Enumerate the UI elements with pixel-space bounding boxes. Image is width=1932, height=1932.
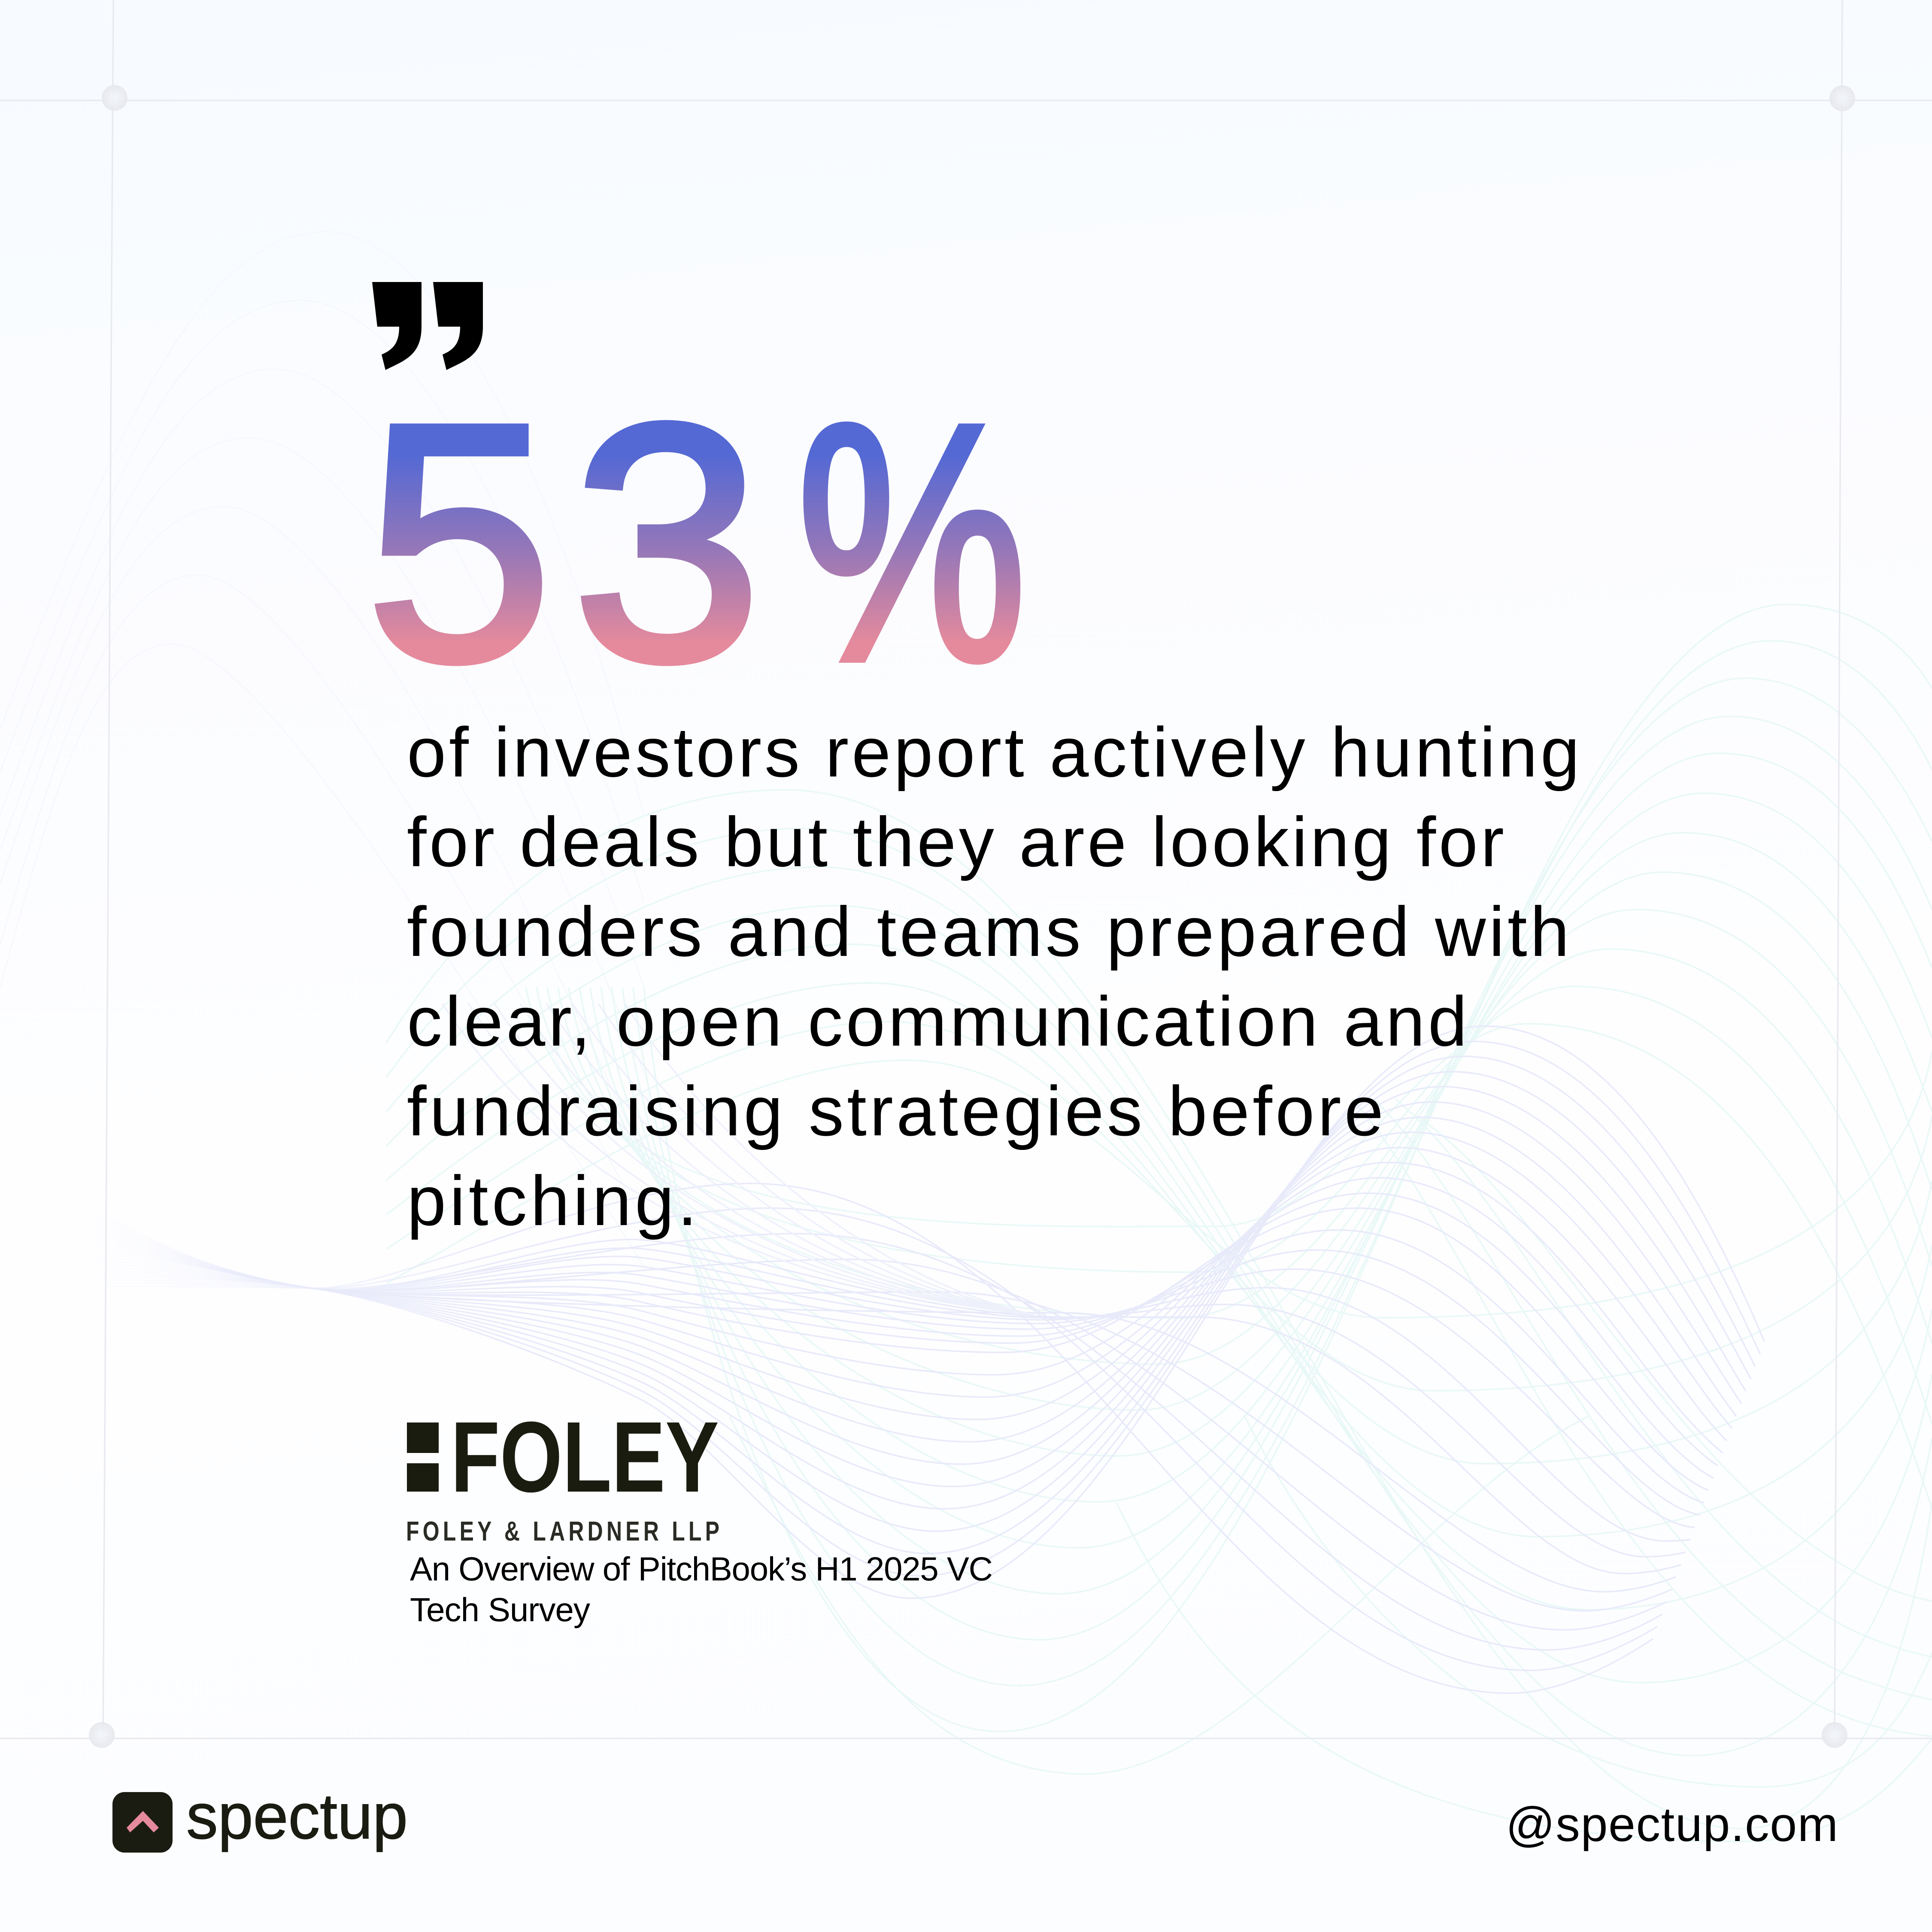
body text: of investors report actively hunting xyxy=(407,713,1580,792)
wave lines, purple family xyxy=(78,1003,1765,1693)
frame: corner dots xyxy=(89,85,1855,1748)
source text: Tech Survey xyxy=(410,1591,590,1629)
icon: quotation mark xyxy=(372,282,483,370)
body text: for deals but they are looking for xyxy=(407,803,1504,881)
logo: spectup: spectup xyxy=(186,1780,408,1852)
body text: clear, open communication and xyxy=(407,982,1467,1061)
body text: pitching. xyxy=(407,1162,697,1240)
handle: @spectup.com: @spectup.com xyxy=(1506,1797,1838,1851)
body text: fundraising strategies before xyxy=(407,1072,1383,1150)
faint wave lines, upper left xyxy=(0,232,644,1266)
wave lines, green family xyxy=(386,604,1932,1841)
statistic: 53%: 3 xyxy=(572,355,762,731)
body text xyxy=(407,713,1580,1240)
logo: Foley xyxy=(406,1401,719,1547)
logo: Foley: FOLEY & LARDNER LLP xyxy=(406,1516,719,1547)
source text xyxy=(410,1550,993,1629)
statistic: 53%: % xyxy=(797,355,1027,731)
body text: founders and teams prepared with xyxy=(407,892,1569,971)
statistic: 53%: 5 xyxy=(366,355,552,731)
logo: Foley: FOLEY xyxy=(451,1401,719,1513)
wave lines, purple cross-hatch xyxy=(442,1003,1035,1315)
source text: An Overview of PitchBook’s H1 2025 VC xyxy=(410,1550,993,1588)
statistic: 53% xyxy=(366,355,1027,731)
